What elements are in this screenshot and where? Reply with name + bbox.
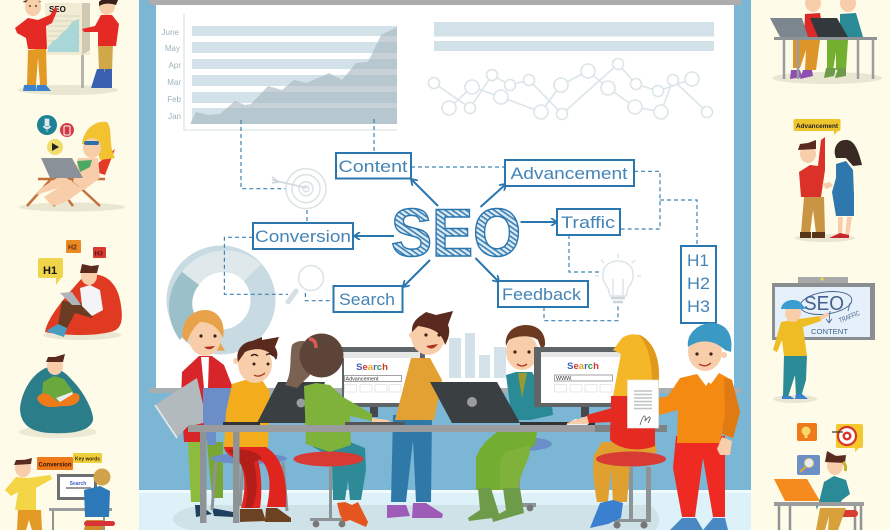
header bars	[434, 22, 714, 51]
bar chart with area trend: May	[165, 44, 180, 53]
side figure: man at SEO whiteboard: TRAFFIC	[838, 310, 861, 325]
person: standing woman in red blazer	[155, 310, 233, 517]
monitor: left search screen: Search	[356, 362, 388, 373]
person: blonde woman from behind with signed document	[567, 334, 666, 529]
side figure: two people with Advancement tag: Advancement	[796, 123, 839, 130]
donut chart	[169, 250, 263, 342]
monitor: left search screen	[342, 347, 425, 417]
monitor: right search screen	[534, 347, 625, 417]
monitor: right search screen: Search	[567, 361, 599, 372]
side figure: two people at laptops	[770, 0, 882, 84]
label: H1 H2 H3: H1	[687, 251, 709, 270]
side figure: man pointing at monitor with tags: Conversion	[38, 462, 72, 468]
chair	[203, 388, 287, 511]
title: SEO: SEO	[391, 195, 521, 271]
person: girl in green hoodie	[285, 334, 392, 527]
person: man in orange sweater and blue cap	[659, 323, 740, 530]
label: Content	[336, 153, 411, 178]
side figure: man pointing at monitor with tags	[5, 453, 115, 530]
label: Traffic: Traffic	[561, 213, 616, 232]
bar chart with area trend: June	[162, 28, 180, 37]
side figure: man at orange laptop with icon bubbles	[774, 423, 864, 530]
monitor: left search screen: Advancement	[346, 376, 379, 382]
person: man in teal jacket	[468, 325, 553, 522]
monitor: right search screen: WWW.	[556, 376, 572, 382]
label: Conversion	[253, 223, 353, 249]
bar chart with area trend: Feb	[167, 95, 182, 104]
label: Feedback: Feedback	[502, 285, 582, 304]
side figure: man pointing at monitor with tags: Key words	[75, 456, 100, 462]
label: Advancement	[505, 160, 634, 186]
label: Search	[334, 286, 402, 312]
bar chart with area trend: Jan	[168, 112, 181, 121]
person: standing man in yellow shirt and jeans	[387, 311, 453, 518]
bar chart with area trend: Mar	[167, 78, 181, 87]
label: H1 H2 H3: H2	[687, 274, 710, 293]
side figure: two people with Advancement tag	[794, 119, 862, 242]
desk	[188, 419, 667, 523]
icon: magnifier	[288, 266, 324, 302]
background bars behind team	[449, 333, 506, 378]
side figure: man on red beanbag with H tags: H1	[43, 265, 57, 277]
label: H1 H2 H3	[681, 246, 716, 323]
side figure: man at SEO whiteboard: CONTENT	[811, 327, 848, 336]
side figure: man on red beanbag with H tags	[38, 240, 122, 340]
bar chart with area trend	[162, 14, 397, 130]
side figure: SEO flipchart presentation	[15, 0, 119, 95]
label: Advancement: Advancement	[510, 164, 628, 183]
side figure: man on red beanbag with H tags: H2	[68, 244, 77, 252]
side figure: man at SEO whiteboard: SEO	[804, 293, 844, 315]
laptop: right	[430, 382, 520, 423]
icon: lightbulb	[595, 254, 641, 302]
label: Feedback	[498, 281, 588, 307]
dashed connector lines	[224, 119, 697, 321]
seo arrows	[354, 179, 557, 287]
laptop: left	[257, 382, 325, 423]
side figure: man on red beanbag with H tags: H3	[94, 250, 103, 258]
person: seated man in yellow shirt	[224, 337, 291, 522]
label: Search: Search	[339, 290, 395, 309]
icon: target	[272, 169, 326, 209]
side figure: SEO flipchart presentation: SEO	[49, 5, 66, 14]
label: Traffic	[557, 209, 620, 235]
bar chart with area trend: Apr	[169, 61, 181, 70]
side figure: man pointing at monitor with tags: Search	[70, 481, 86, 487]
line chart	[428, 58, 712, 120]
central classroom background	[139, 0, 751, 530]
side figure: man at SEO whiteboard	[772, 277, 875, 403]
side figure: man on teal beanbag	[19, 354, 97, 438]
side figure: woman on deck chair with laptop	[19, 115, 125, 212]
label: H1 H2 H3: H3	[687, 297, 710, 316]
label: Content: Content	[338, 157, 408, 176]
label: Conversion: Conversion	[255, 227, 351, 246]
